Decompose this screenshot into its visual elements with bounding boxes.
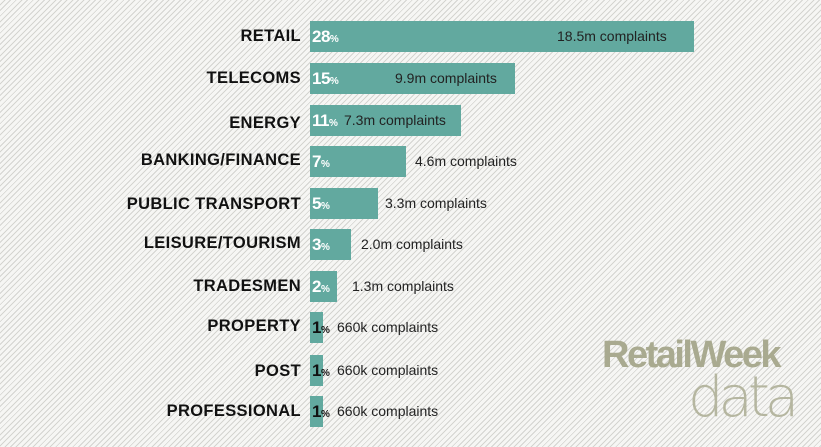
row: banking: 7% — [312, 152, 329, 171]
row: property: 660k complaints — [337, 319, 438, 335]
row: public transport: 5% — [312, 194, 329, 213]
row: property: PROPERTY — [207, 317, 301, 335]
row: banking: 4.6m complaints — [415, 153, 517, 169]
row: energy: 11% — [312, 111, 337, 130]
row: telecoms: TELECOMS — [207, 69, 301, 87]
row: professional — [167, 396, 438, 427]
row: energy: ENERGY — [229, 114, 301, 132]
row: post: 660k complaints — [337, 362, 438, 378]
row: post: POST — [255, 362, 301, 380]
row: professional: 660k complaints — [337, 403, 438, 419]
row: leisure: 3% — [312, 235, 329, 254]
logo: RetailWeek data: RetailWeek — [602, 334, 779, 376]
row: leisure: 2.0m complaints — [361, 236, 463, 252]
row: tradesmen: 2% — [312, 277, 329, 296]
row: professional: PROFESSIONAL — [167, 402, 301, 420]
row: energy: 7.3m complaints — [344, 112, 446, 128]
row: retail: 18.5m complaints — [557, 28, 667, 44]
logo: RetailWeek data: data — [688, 365, 794, 430]
row: banking — [141, 146, 517, 177]
row: property: 1% — [312, 318, 329, 337]
row: professional: 1% — [312, 402, 329, 421]
row: tradesmen — [193, 271, 454, 302]
row: telecoms: 9.9m complaints — [395, 70, 497, 86]
row: telecoms — [206, 63, 515, 94]
row: banking: BANKING/FINANCE — [141, 151, 301, 169]
row: post — [255, 355, 438, 386]
row: tradesmen: 1.3m complaints — [352, 278, 454, 294]
row: retail: 28% — [312, 27, 338, 46]
row: leisure: LEISURE/TOURISM — [144, 234, 301, 252]
row: public transport: PUBLIC TRANSPORT — [127, 195, 301, 213]
row: retail — [241, 21, 694, 52]
logo: RetailWeek data — [602, 334, 794, 430]
row: telecoms: 15% — [312, 69, 338, 88]
row: retail: RETAIL — [241, 27, 301, 45]
row: property — [207, 312, 438, 343]
row: leisure — [144, 229, 463, 260]
row: public transport: 3.3m complaints — [385, 195, 487, 211]
row: energy — [229, 105, 461, 136]
row: public transport — [127, 188, 487, 219]
row: post: 1% — [312, 361, 329, 380]
row: tradesmen: TRADESMEN — [193, 277, 301, 295]
